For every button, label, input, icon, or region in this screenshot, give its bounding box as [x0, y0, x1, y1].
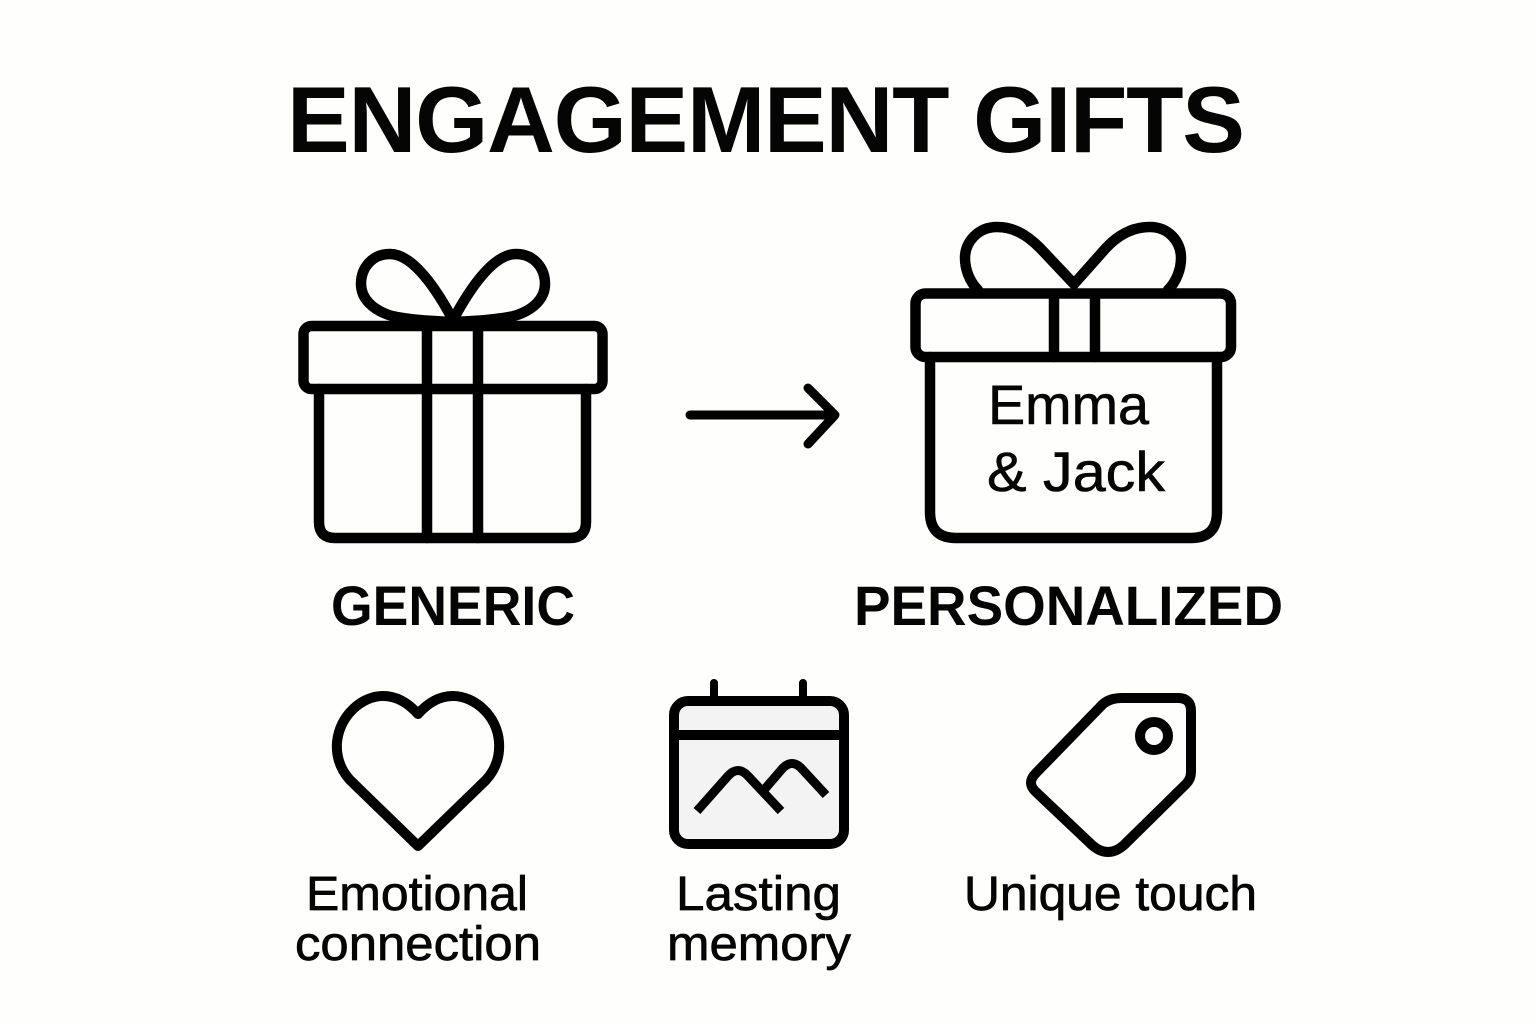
icon: generic gift box — [304, 254, 602, 538]
benefit: lasting memory: memory — [667, 918, 851, 971]
engraved names: Emma — [988, 373, 1150, 436]
benefit: emotional connection — [295, 868, 541, 971]
benefit: lasting memory: Lasting — [676, 868, 841, 921]
icon: personalized gift box — [916, 227, 1231, 538]
benefit: lasting memory — [667, 868, 851, 971]
engraved names — [987, 373, 1166, 503]
icon: price tag — [1031, 698, 1191, 852]
title: ENGAGEMENT GIFTS — [287, 67, 1245, 172]
benefit: emotional connection: connection — [295, 918, 541, 971]
benefit: unique touch: Unique touch — [964, 868, 1257, 921]
label: generic: GENERIC — [331, 574, 575, 637]
icon: heart — [337, 696, 499, 846]
arrow: generic to personalized — [690, 388, 835, 444]
benefit: emotional connection: Emotional — [306, 868, 528, 921]
label: personalized: PERSONALIZED — [854, 574, 1283, 637]
engraved names: & Jack — [987, 440, 1166, 503]
icon: calendar with photo — [674, 683, 844, 844]
